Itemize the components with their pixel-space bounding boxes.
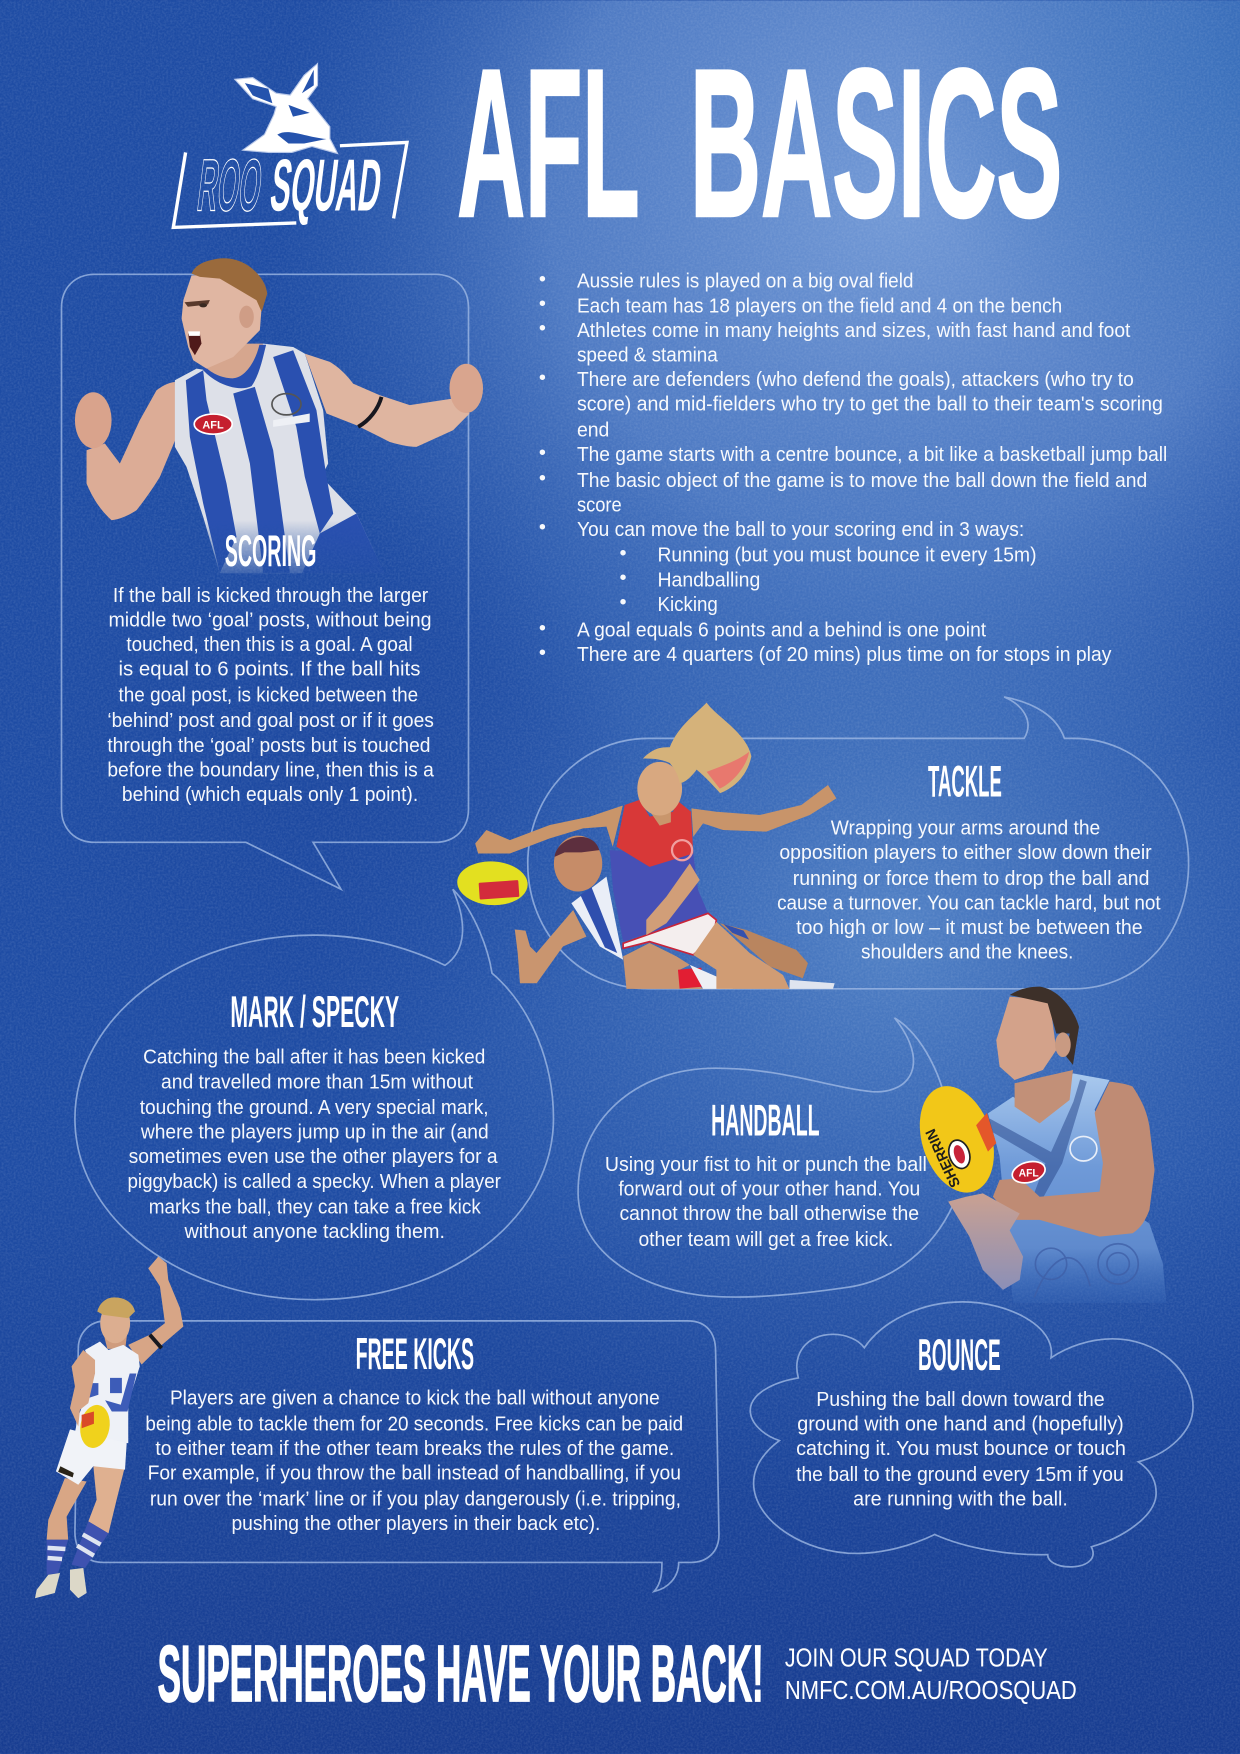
text: mark body [127,1047,501,1243]
text: mark body: without anyone tackling them. [184,1221,445,1243]
footer call to action: NMFC.COM.AU/ROOSQUAD [785,1677,1077,1705]
icon: Sherrin football [907,1077,1007,1202]
badge: AFL logo: AFL [202,420,224,432]
bullet list: game overview: You can move the ball to your scoring end in 3 ways: [577,519,1024,541]
text: tackle body: opposition players to either slow down their [779,842,1152,864]
bullet list: game overview: The basic object of the game is to move the ball down the field and [577,470,1147,492]
badge: AFL logo [1010,1158,1047,1186]
text: tackle body: cause a turnover. You can tackle hard, but not [777,892,1161,914]
panel: free kicks: FREE KICKS [356,1330,474,1379]
bullet list: game overview: • [539,517,546,539]
panel: mark / specky: MARK / SPECKY [230,988,399,1037]
text: scoring body [107,585,435,806]
bullet list: game overview: • [539,642,546,664]
text: handball body: cannot throw the ball otherwise the [619,1203,919,1225]
text: free kicks body: Players are given a chance to kick the ball without anyone [170,1388,660,1410]
bullet list: game overview: • [539,442,546,464]
bullet list: game overview: Each team has 18 players on the field and 4 on the bench [577,295,1062,317]
footer call to action: JOIN OUR SQUAD TODAY [785,1644,1048,1672]
text: handball body: forward out of your other hand. You [618,1179,920,1201]
text: scoring body: is equal to 6 points. If the ball hits [119,659,420,681]
bullet list: game overview: • [539,318,546,340]
speech bubble: handball [578,1018,953,1297]
bullet list: game overview: • [619,592,626,614]
icon: yellow football [77,1403,113,1450]
bullet list: game overview: A goal equals 6 points and a behind is one point [577,620,987,642]
bullet list: game overview: • [539,468,546,490]
photo: cheering player [75,258,483,573]
bullet list: game overview: • [619,542,626,564]
bullet list: game overview: Athletes come in many heights and sizes, with fast hand and foot [577,320,1131,342]
badge: AFL logo [194,414,232,434]
footer call to action [785,1644,1077,1705]
bullet list: game overview: • [539,367,546,389]
badge: AFL logo: AFL [1019,1168,1039,1180]
text: mark body: and travelled more than 15m without [161,1071,473,1093]
text: handball body: Using your fist to hit or punch the ball [605,1154,927,1176]
text: mark body: where the players jump up in the air (and [140,1122,489,1144]
bullet list: game overview: score [577,494,622,516]
text: bounce body: are running with the ball. [853,1488,1068,1510]
text: bounce body: Pushing the ball down toward the [816,1389,1105,1411]
bullet list: game overview: • [539,269,546,291]
icon: kangaroo head [235,64,338,154]
panel: mark / specky [75,889,553,1300]
panel: handball: HANDBALL [711,1096,820,1145]
speech bubble: mark [75,889,553,1300]
panel: tackle: TACKLE [928,757,1002,806]
photo: kicking player [35,1256,183,1598]
text: scoring body: before the boundary line, then this is a [107,759,435,781]
logo frame [173,142,407,227]
bullet list: game overview: • [539,617,546,639]
title [457,26,1062,261]
text: tackle body: shoulders and the knees. [861,942,1073,964]
bullet list: game overview: There are defenders (who defend the goals), attackers (who try to [577,369,1134,391]
bullet list: game overview: Running (but you must bounce it every 15m) [657,545,1037,567]
text: scoring body: through the ‘goal’ posts but is touched [107,735,430,757]
text: scoring body: behind (which equals only 1 point). [122,784,418,806]
bullet list: game overview: • [619,567,626,589]
text: free kicks body: For example, if you throw the ball instead of handballing, if you [148,1463,681,1485]
bullet list: game overview: There are 4 quarters (of 20 mins) plus time on for stops in play [577,644,1112,666]
bullet list: game overview: score) and mid-fielders who try to get the ball to their team's scoring [577,394,1163,416]
text: tackle body: Wrapping your arms around the [831,818,1100,840]
bullet list: game overview: Kicking [657,594,718,616]
text: handball body [605,1154,927,1251]
text: free kicks body: pushing the other players in their back etc). [231,1513,600,1535]
bullet list: game overview: end [577,419,609,441]
bullet list: game overview: Aussie rules is played on a big oval field [577,271,914,293]
text: bounce body [796,1389,1126,1510]
bullet list: game overview [539,269,1167,666]
title: AFL [457,26,640,261]
text: mark body: Catching the ball after it has been kicked [143,1047,485,1069]
panel: bounce [750,1302,1193,1567]
text: tackle body [777,818,1161,964]
text: bounce body: ground with one hand and (hopefully) [797,1413,1124,1435]
speech bubble: scoring [61,274,468,889]
text: handball body: other team will get a free kick. [638,1229,893,1251]
text: mark body: touching the ground. A very special mark, [140,1097,489,1119]
panel: scoring [61,258,483,889]
panel: free kicks [35,1256,719,1598]
text: scoring body: touched, then this is a goal. A goal [126,634,413,656]
speech bubble: tackle [528,697,1189,989]
text: mark body: piggyback) is called a specky. When a player [127,1171,501,1193]
logo wordmark: ROO [194,144,266,227]
text: mark body: sometimes even use the other players for a [129,1146,498,1168]
text: free kicks body [145,1388,683,1535]
icon: Sherrin football: SHERRIN [923,1126,964,1190]
panel: bounce: BOUNCE [918,1331,1001,1380]
text: scoring body: ‘behind’ post and goal post or if it goes [107,710,434,732]
text: scoring body: If the ball is kicked through the larger [113,585,429,607]
text: scoring body: middle two ‘goal’ posts, without being [108,610,432,632]
logo: Roo Squad [173,64,407,227]
text: mark body: marks the ball, they can take a free kick [149,1197,482,1219]
icon: yellow football [456,860,529,907]
bullet list: game overview: The game starts with a centre bounce, a bit like a basketball jump ball [577,444,1167,466]
text: tackle body: running or force them to drop the ball and [793,868,1149,890]
logo: Roo Squad: SQUAD [266,144,386,227]
text: bounce body: catching it. You must bounce or touch [796,1438,1126,1460]
text: free kicks body: being able to tackle them for 20 seconds. Free kicks can be paid [145,1413,683,1435]
speech bubble: bounce cloud [750,1302,1193,1567]
text: free kicks body: run over the ‘mark’ line or if you play dangerously (i.e. tripping, [150,1488,681,1510]
panel: scoring: SCORING [225,527,316,576]
text: bounce body: the ball to the ground every 15m if you [796,1464,1124,1486]
panel: tackle [456,697,1189,989]
text: free kicks body: to either team if the other team breaks the rules of the game. [155,1438,674,1460]
bullet list: game overview: • [539,293,546,315]
photo: handballing player [907,987,1166,1303]
text: tackle body: too high or low – it must be between the [796,917,1143,939]
photo: tackling players and ball [456,703,836,989]
bullet list: game overview: speed & stamina [577,345,719,367]
text: scoring body: the goal post, is kicked between the [119,684,418,706]
speech bubble: free kicks [75,1321,719,1591]
panel: handball [578,987,1166,1303]
bullet list: game overview: Handballing [657,569,760,591]
